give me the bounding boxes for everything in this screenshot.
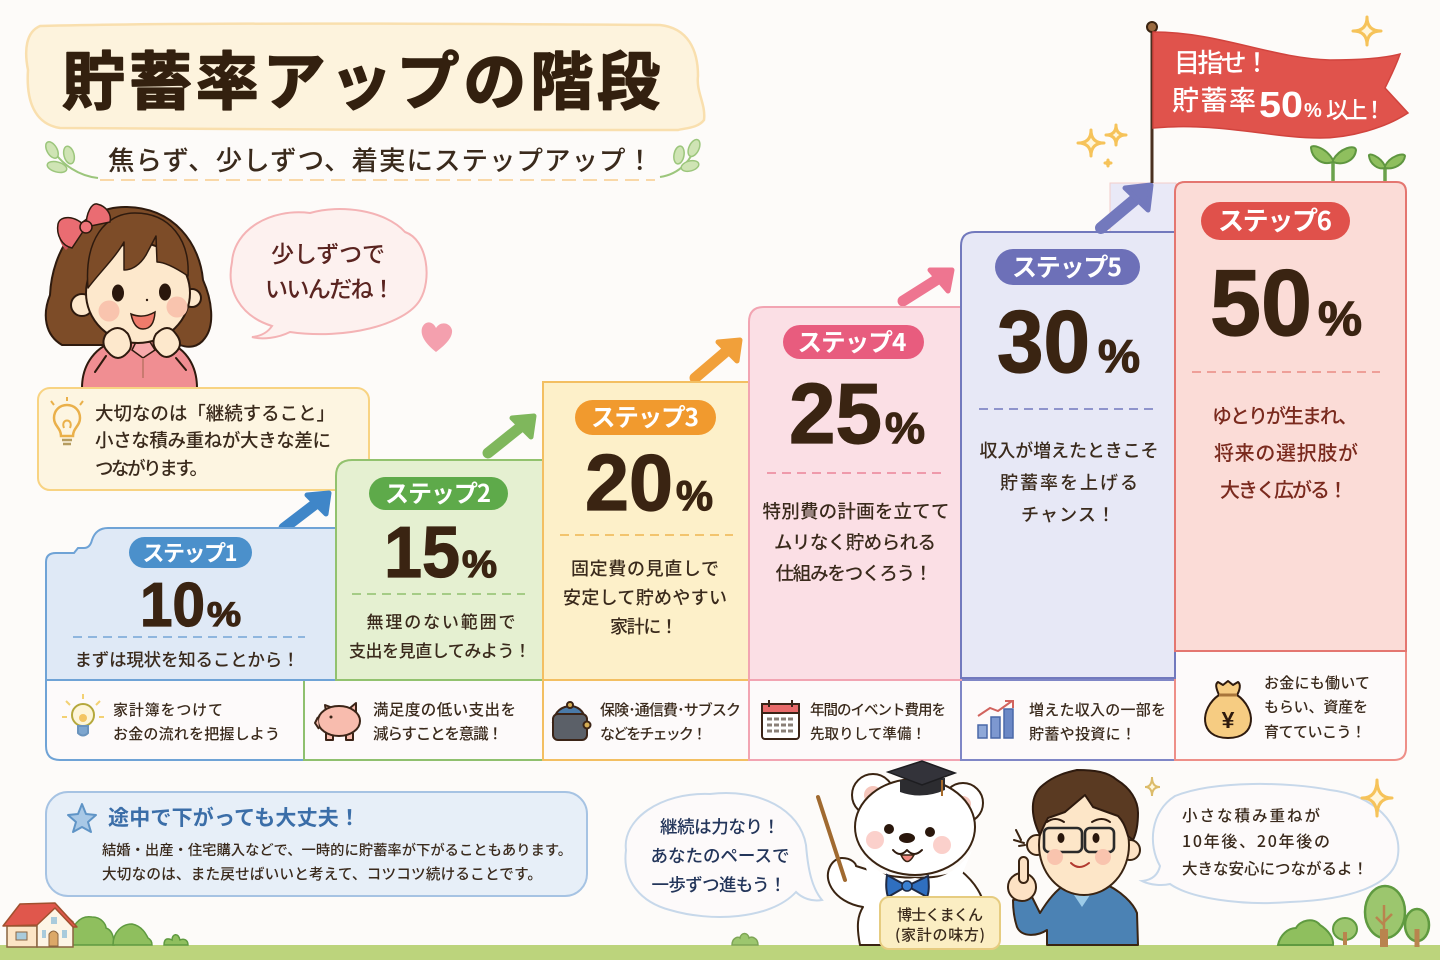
icon: light bulb [51, 397, 83, 444]
step 2 text [349, 608, 531, 662]
character: bear professor [818, 761, 1000, 949]
name plate: (家計の味方) [895, 924, 985, 945]
arrow: step 2 to 3 [488, 416, 534, 453]
icon: heart [422, 322, 452, 352]
panel: tip 5: 増えた収入の一部を [1029, 699, 1166, 720]
character: boy [1008, 770, 1140, 945]
speech bubble: boy: 10年後、20年後の [1182, 828, 1330, 852]
step 6 text: ゆとりが生まれ、 [1212, 400, 1358, 429]
step 1 text: まずは現状を知ることから！ [74, 647, 300, 672]
note heading: 途中で下がっても大丈夫！ [108, 802, 360, 832]
callout: keep going [38, 388, 369, 490]
speech bubble: bear [625, 793, 822, 917]
speech bubble: girl: いいんだね！ [265, 270, 395, 304]
right trees and bushes [1278, 886, 1429, 947]
icon: money bag: ¥ [1222, 707, 1235, 733]
step 5 label: ステップ5 [1012, 248, 1122, 284]
sparkles [1078, 17, 1381, 166]
panel: tip 6 [1175, 651, 1406, 760]
character: girl [46, 204, 211, 388]
step 6 label: ステップ6 [1218, 201, 1332, 238]
speech bubble: girl: 少しずつで [271, 235, 385, 269]
step 5 text: 貯蓄率を上げる [1000, 469, 1138, 495]
panel: tip 1: お金の流れを把握しよう [113, 723, 280, 744]
step 3 text: 安定して貯めやすい [563, 584, 727, 610]
graduation cap [888, 761, 955, 796]
icon: piggy bank [315, 703, 360, 740]
panel: tip 6: もらい、資産を [1264, 696, 1368, 717]
step 5 percent: 30 [997, 292, 1090, 391]
speech bubble: boy [1142, 784, 1398, 903]
step 1 percent [140, 571, 241, 640]
panel: step 4 [749, 307, 961, 680]
step 3 label: ステップ3 [591, 399, 699, 434]
panel: tip 2 [304, 680, 543, 760]
panel: tip 2: 満足度の低い支出を [373, 698, 516, 720]
step 3 percent [585, 438, 713, 527]
panel: tip 6: 育てていこう！ [1264, 721, 1366, 742]
callout: keep going: 小さな積み重ねが大きな差に [95, 427, 331, 453]
panel: tip 3: 保険･通信費･サブスク [600, 699, 741, 720]
step 4 label: ステップ4 [798, 324, 906, 359]
title text: 貯蓄率アップの階段 [62, 32, 660, 123]
step 2 text: 支出を見直してみよう！ [349, 637, 531, 662]
speech bubble: boy: 小さな積み重ねが [1182, 804, 1320, 826]
step 4 text [762, 498, 950, 586]
arrow: step 3 to 4 [695, 340, 740, 378]
icon: right laurel leaves [660, 138, 702, 177]
lower tips row [46, 651, 1406, 760]
panel: step 5 [961, 232, 1175, 678]
flag text: % [1304, 100, 1322, 122]
callout: keep going: つながります。 [95, 455, 208, 481]
panel: tip 5 [961, 680, 1175, 760]
step 6 text: 大きく広がる！ [1220, 474, 1348, 503]
icon: left laurel leaves [43, 140, 98, 178]
step 1 percent: % [207, 596, 241, 634]
panel: step 2 [336, 460, 543, 680]
step 3 percent: 20 [585, 438, 673, 527]
step 6 percent: % [1318, 293, 1362, 346]
left bushes [70, 917, 188, 945]
name plate [880, 897, 1000, 949]
panel: tip 4: 年間のイベント費用を [810, 699, 946, 720]
flag [1147, 22, 1408, 183]
panel: tip 4 [749, 680, 961, 760]
step 5 percent [997, 292, 1140, 391]
panel: step 3 [543, 382, 749, 680]
callout: keep going: 大切なのは「継続すること」 [95, 400, 335, 426]
flag text: 目指せ！ [1174, 43, 1270, 80]
step 5 text: 収入が増えたときこそ [980, 437, 1158, 463]
panel: tip 6: お金にも働いて [1264, 672, 1370, 693]
icon: star [68, 804, 96, 832]
step 4 percent: 25 [789, 367, 882, 462]
step 3 text: 固定費の見直しで [571, 555, 719, 581]
step 4 text: 仕組みをつくろう！ [776, 560, 932, 586]
icon: wallet [553, 702, 590, 740]
step 2 label: ステップ2 [385, 474, 491, 509]
name plate: 博士くまくん [897, 904, 983, 925]
step 3 text [563, 555, 727, 639]
arrow: step 5 to 6 [1101, 185, 1151, 228]
icon: money bag [1205, 681, 1251, 738]
step 6 percent [1210, 250, 1362, 355]
arrow: step 1 to 2 [284, 493, 329, 528]
step 5 text: チャンス！ [1021, 501, 1115, 527]
step 2 percent: 15 [384, 513, 460, 593]
speech bubble: bear: 継続は力なり！ [660, 814, 780, 839]
sparkle near speech bubble [1362, 780, 1392, 816]
step 3 text: 家計に！ [610, 613, 678, 639]
subtitle: 焦らず、少しずつ、着実にステップアップ！ [108, 139, 653, 178]
speech bubble: girl [231, 209, 427, 338]
panel: step 1 [46, 528, 336, 680]
note body: 大切なのは、また戻せばいいと考えて、コツコツ続けることです。 [102, 863, 542, 884]
icon: bulb [62, 694, 104, 736]
step 2 percent: % [462, 544, 497, 586]
speech bubble: bear: あなたのペースで [650, 843, 790, 868]
flag text: 貯蓄率 [1172, 79, 1256, 118]
emphasis marks [1014, 830, 1025, 846]
step 6 percent: 50 [1210, 250, 1312, 355]
step 4 percent: % [885, 404, 925, 453]
step 3 percent: % [676, 472, 713, 519]
step 6 text [1212, 400, 1358, 503]
panel: tip 5: 貯蓄や投資に！ [1029, 723, 1136, 744]
step 1 label: ステップ1 [142, 536, 238, 568]
icon: calendar [762, 700, 799, 739]
step 1 percent: 10 [140, 571, 205, 640]
background block behind step 6 [1110, 183, 1176, 233]
step 2 text: 無理のない範囲で [366, 608, 516, 633]
speech bubble: bear: 一歩ずつ進もう！ [652, 872, 786, 897]
small grass tuft [732, 934, 758, 945]
step 6 text: 将来の選択肢が [1214, 437, 1358, 466]
step 5 percent: % [1098, 330, 1140, 382]
step 5 text [980, 437, 1158, 527]
note body [102, 839, 572, 884]
flag text: 以上！ [1326, 91, 1386, 125]
icon: small sparkle near boy [1145, 777, 1160, 796]
step 4 text: 特別費の計画を立てて [762, 498, 950, 524]
panel: tip 4: 先取りして準備！ [810, 723, 926, 744]
step 4 percent [789, 367, 925, 462]
icon: growth bars [978, 701, 1013, 738]
icon: house [3, 903, 77, 947]
icon: sprouts [1311, 146, 1405, 181]
note body: 結婚・出産・住宅購入などで、一時的に貯蓄率が下がることもあります。 [102, 839, 572, 860]
flag text [1172, 43, 1386, 125]
note panel: it is OK to dip [46, 792, 587, 896]
ground strip [0, 945, 1440, 960]
step 4 text: ムリなく貯められる [774, 529, 936, 555]
title banner [26, 24, 704, 130]
panel: tip 3 [543, 680, 749, 760]
panel: tip 1: 家計簿をつけて [113, 699, 223, 720]
flag text: 50 [1259, 84, 1303, 125]
panel: tip 3: などをチェック！ [600, 723, 707, 744]
panel: step 6 [1175, 182, 1406, 651]
arrow: step 4 to 5 [903, 270, 952, 301]
panel: tip 2: 減らすことを意識！ [373, 722, 503, 744]
panel: tip 1 [46, 680, 304, 760]
speech bubble: boy: 大きな安心につながるよ！ [1182, 857, 1368, 879]
